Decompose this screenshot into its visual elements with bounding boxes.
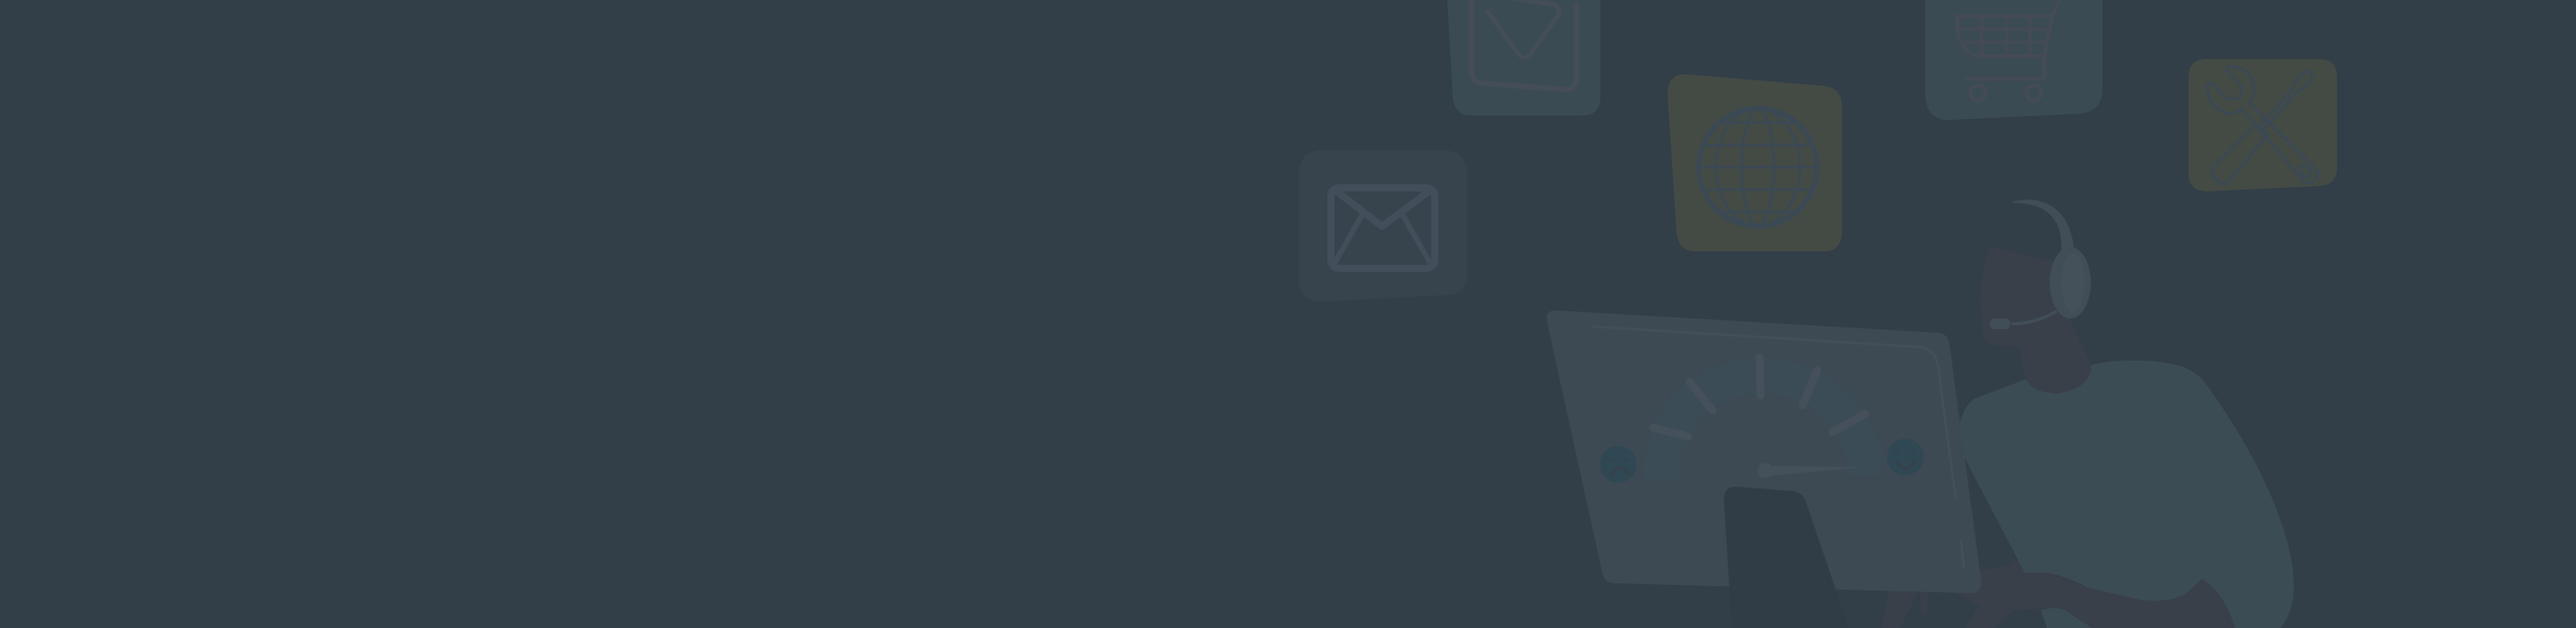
agent: teal sweater	[1960, 361, 2294, 628]
satisfaction gauge	[1653, 358, 1865, 480]
agent: head and neck	[1980, 246, 2092, 394]
agent: legs and arm behind monitor	[1881, 559, 2235, 628]
icon card: globe	[1668, 74, 1842, 251]
sad face	[1600, 446, 1636, 483]
icon card: checkmark document	[1447, 0, 1600, 115]
happy face	[1887, 438, 1923, 476]
icon card: shopping cart	[1925, 0, 2103, 120]
icon card: wrench and screwdriver	[2188, 59, 2337, 191]
agent: headset	[1990, 199, 2091, 329]
monitor stand	[1724, 487, 1849, 628]
icon card: envelope	[1299, 150, 1467, 301]
monitor	[1547, 310, 1982, 593]
